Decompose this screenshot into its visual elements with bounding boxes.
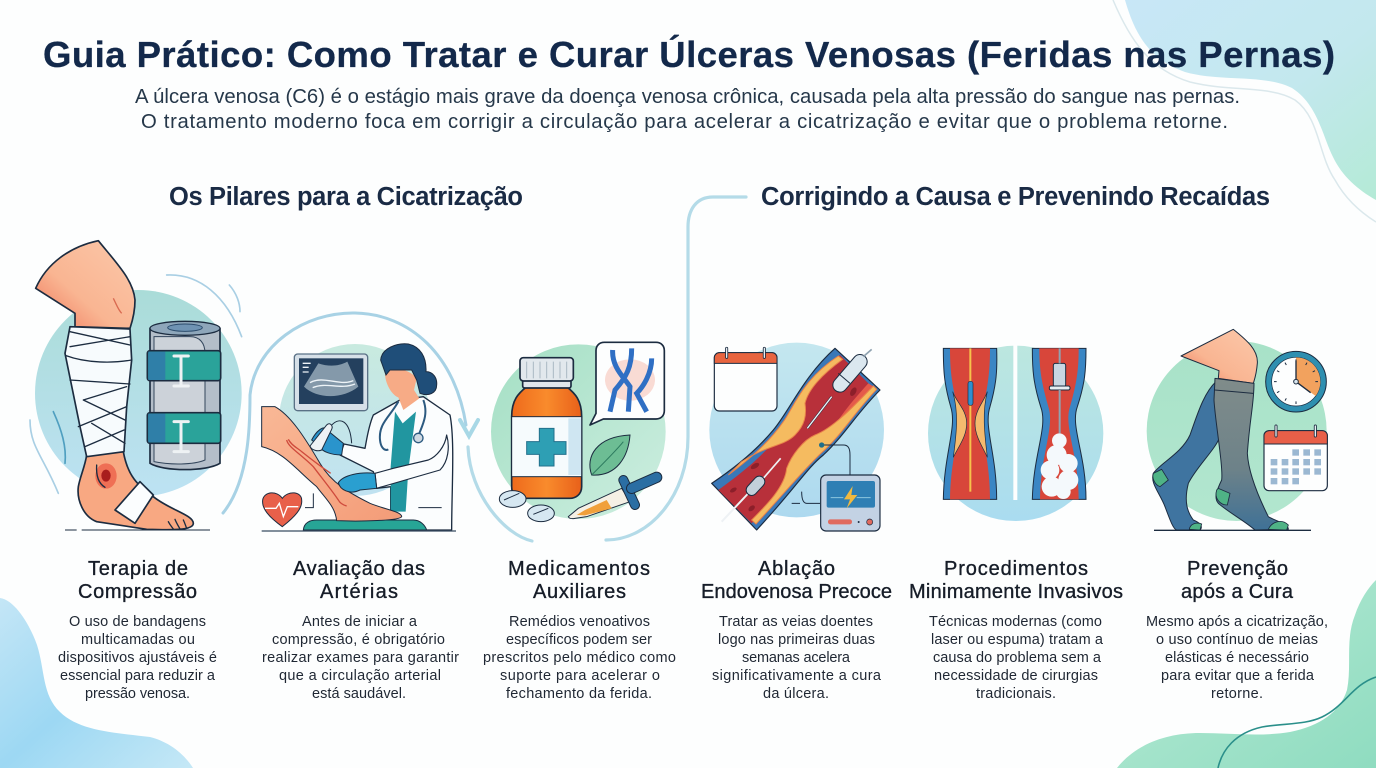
calendar bbox=[714, 348, 777, 411]
panel: terapia de compressao illustration bbox=[30, 241, 242, 530]
center divider bbox=[1013, 343, 1017, 500]
panel: avaliacao das arterias illustration bbox=[262, 344, 456, 531]
text block: procedimentos minimamente invasivos: Técnicas modernas (como bbox=[929, 614, 1102, 630]
ulcer bbox=[95, 463, 117, 489]
text block: terapia de compressao: Terapia de bbox=[88, 558, 188, 580]
right vein: foam bbox=[1032, 348, 1086, 499]
text block: procedimentos minimamente invasivos: Minimamente Invasivos bbox=[909, 581, 1123, 603]
thigh and knee bbox=[36, 241, 135, 328]
text block: avaliacao das arterias: compressão, é obrigatório bbox=[272, 632, 445, 648]
text block: prevencao apos a cura: elásticas é necessário bbox=[1165, 650, 1309, 666]
text block: avaliacao das arterias: Artérias bbox=[320, 581, 398, 603]
heart rate icon bbox=[263, 493, 302, 527]
back sock patches bbox=[1153, 469, 1202, 530]
leg bandage bbox=[65, 327, 132, 457]
panel: ablacao illustration bbox=[709, 343, 884, 531]
wire bbox=[305, 493, 313, 508]
circle backdrop bbox=[279, 344, 431, 496]
text block: prevencao apos a cura: para evitar que a ferida bbox=[1161, 668, 1315, 684]
laser catheter bottom bbox=[722, 458, 781, 522]
text block: avaliacao das arterias: que a circulação arterial bbox=[279, 668, 441, 684]
text block: avaliacao das arterias: está saudável. bbox=[312, 686, 406, 702]
text block: prevencao apos a cura: após a Cura bbox=[1181, 581, 1294, 603]
patient leg bbox=[262, 407, 402, 521]
panel: procedimentos illustration bbox=[928, 343, 1103, 521]
text block: medicamentos auxiliares: fechamento da ferida. bbox=[506, 686, 652, 702]
text block: medicamentos auxiliares: suporte para acelerar o bbox=[500, 668, 660, 684]
text block: ablacao endovenosa: Endovenosa Precoce bbox=[701, 581, 892, 603]
decorative blob: top right bbox=[1113, 0, 1376, 222]
decorative blob: bottom left bbox=[0, 598, 193, 768]
text block: ablacao endovenosa: da úlcera. bbox=[763, 686, 829, 702]
pills bbox=[499, 491, 554, 522]
intro text: O tratamento moderno foca em corrigir a circulação para acelerar a cicatrização e evitar que o problema retorne. bbox=[141, 111, 1228, 133]
front sock bbox=[1214, 378, 1288, 530]
text block: medicamentos auxiliares: prescritos pelo médico como bbox=[483, 650, 676, 666]
ground line bbox=[65, 528, 210, 531]
text block: prevencao apos a cura: Mesmo após a cicatrização, bbox=[1146, 614, 1328, 630]
calendar bbox=[1264, 426, 1327, 491]
front sock patches bbox=[1216, 488, 1288, 530]
section heading: pilares: Os Pilares para a Cicatrização bbox=[169, 183, 523, 211]
text block: terapia de compressao: Compressão bbox=[78, 581, 197, 603]
clock bbox=[1266, 351, 1326, 412]
foot bandage bbox=[115, 482, 153, 523]
intro text: A úlcera venosa (C6) é o estágio mais grave da doença venosa crônica, causada pela alta pressão do sangue nas pernas. bbox=[135, 86, 1240, 108]
ultrasound monitor bbox=[294, 354, 368, 411]
circle backdrop bbox=[35, 290, 242, 497]
text block: ablacao endovenosa: logo nas primeiras duas bbox=[718, 632, 875, 648]
toes bbox=[168, 519, 187, 529]
text block: avaliacao das arterias: realizar exames para garantir bbox=[262, 650, 459, 666]
arrow: loop around evaluation panel bbox=[223, 313, 478, 513]
vein cross section bbox=[712, 348, 880, 530]
decorative blob: bottom right bbox=[1117, 580, 1376, 768]
intro text bbox=[135, 86, 1240, 133]
text block: ablacao endovenosa: significativamente a cura bbox=[712, 668, 882, 684]
lower leg and foot bbox=[78, 452, 193, 530]
text block: prevencao apos a cura: Prevenção bbox=[1187, 558, 1288, 580]
text block: ablacao endovenosa: Ablação bbox=[758, 558, 835, 580]
text block: medicamentos auxiliares: Remédios venoativos bbox=[509, 614, 650, 630]
text block: terapia de compressao: pressão venosa. bbox=[85, 686, 190, 702]
text block: terapia de compressao: essencial para reduzir a bbox=[60, 668, 216, 684]
energy device and wires bbox=[792, 442, 880, 531]
back sock bbox=[1153, 382, 1220, 530]
compression device bbox=[147, 321, 221, 470]
text block: prevencao apos a cura: o uso contínuo de meias bbox=[1156, 632, 1318, 648]
circle backdrop bbox=[1147, 341, 1327, 521]
ground line bbox=[262, 529, 456, 533]
text block: procedimentos minimamente invasivos: necessidade de cirurgias bbox=[934, 668, 1098, 684]
text block: avaliacao das arterias: Avaliação das bbox=[293, 558, 425, 580]
text block: medicamentos auxiliares: Auxiliares bbox=[533, 581, 626, 603]
text block: prevencao apos a cura bbox=[1146, 558, 1328, 702]
text block: procedimentos minimamente invasivos: tradicionais. bbox=[976, 686, 1056, 702]
left vein: laser bbox=[943, 348, 997, 499]
text block: ablacao endovenosa bbox=[701, 558, 892, 702]
leaf bbox=[590, 435, 630, 475]
ultrasound probe and gloved hands bbox=[310, 421, 377, 492]
connector line between sections bbox=[468, 197, 746, 541]
text block: procedimentos minimamente invasivos: causa do problema sem a bbox=[933, 650, 1102, 666]
text block: procedimentos minimamente invasivos: Procedimentos bbox=[944, 558, 1088, 580]
motion lines bbox=[30, 275, 242, 493]
section heading: causa: Corrigindo a Causa e Prevenindo Recaídas bbox=[761, 183, 1270, 211]
text block: procedimentos minimamente invasivos bbox=[909, 558, 1123, 702]
panel: prevencao illustration bbox=[1147, 329, 1327, 530]
text block: terapia de compressao: multicamadas ou bbox=[81, 632, 195, 648]
text block: avaliacao das arterias bbox=[262, 558, 459, 702]
text block: terapia de compressao: O uso de bandagens bbox=[69, 614, 206, 630]
circle backdrop bbox=[709, 343, 884, 517]
text block: terapia de compressao bbox=[58, 558, 217, 702]
text block: avaliacao das arterias: Antes de iniciar a bbox=[302, 614, 418, 630]
treatment table bbox=[303, 520, 427, 530]
laser catheter top bbox=[807, 349, 872, 428]
text block: medicamentos auxiliares bbox=[483, 558, 676, 702]
medicine bottle bbox=[512, 358, 582, 498]
dropper bbox=[568, 477, 657, 519]
text block: prevencao apos a cura: retorne. bbox=[1211, 686, 1263, 702]
title: Guia Prático: Como Tratar e Curar Úlceras Venosas (Feridas nas Pernas) bbox=[43, 33, 1335, 75]
doctor bbox=[340, 344, 453, 530]
text block: ablacao endovenosa: semanas acelera bbox=[742, 650, 851, 666]
circle backdrop bbox=[491, 344, 666, 519]
circle backdrop bbox=[928, 346, 1103, 521]
text block: procedimentos minimamente invasivos: laser ou espuma) tratam a bbox=[931, 632, 1104, 648]
knee bbox=[1181, 329, 1257, 383]
panel: medicamentos illustration bbox=[491, 342, 666, 522]
text block: medicamentos auxiliares: específicos podem ser bbox=[506, 632, 652, 648]
text block: ablacao endovenosa: Tratar as veias doentes bbox=[719, 614, 873, 630]
text block: medicamentos auxiliares: Medicamentos bbox=[508, 558, 650, 580]
text block: terapia de compressao: dispositivos ajustáveis é bbox=[58, 650, 217, 666]
speech bubble with veins bbox=[590, 342, 664, 425]
ground line bbox=[1154, 528, 1311, 532]
